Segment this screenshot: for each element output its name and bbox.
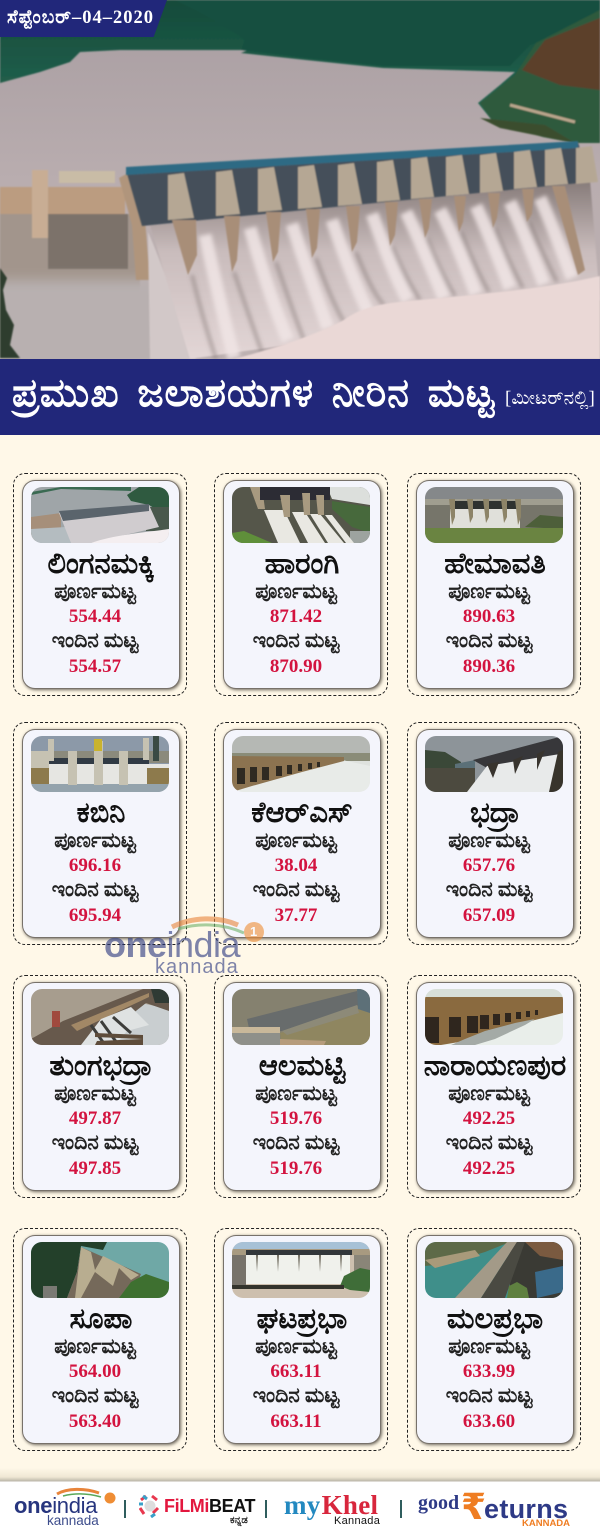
panel: ಕೆಆರ್‌ಎಸ್ (214, 722, 388, 945)
panel: ಕಬಿನಿ: 695.94 (69, 905, 121, 926)
separator (265, 1500, 267, 1518)
logo: goodreturns: eturns (484, 1494, 568, 1524)
hero photo: dam with open spillways (0, 0, 600, 359)
full level: ಪೂರ್ಣಮಟ್ಟ (54, 1083, 136, 1105)
photo: Harangi dam (232, 487, 370, 543)
watermark: oneindia kannada (104, 916, 264, 978)
photo: Hemavathi dam (425, 487, 563, 543)
logo: mykhel: myKhel (284, 1490, 378, 1520)
panel: ಆಲಮಟ್ಟಿ: 519.76 (270, 1158, 322, 1179)
panel: ಭದ್ರಾ (407, 722, 581, 945)
today's level: ಇಂದಿನ ಮಟ್ಟ (446, 879, 532, 901)
today's level: ಇಂದಿನ ಮಟ್ಟ (253, 879, 339, 901)
date ribbon (0, 0, 167, 37)
today's level: ಇಂದಿನ ಮಟ್ಟ (52, 630, 138, 652)
today's level: ಇಂದಿನ ಮಟ್ಟ (446, 1385, 532, 1407)
panel: ನಾರಾಯಣಪುರ: 492.25 (463, 1158, 515, 1179)
today's level: ಇಂದಿನ ಮಟ್ಟ (446, 1132, 532, 1154)
separator (124, 1500, 126, 1518)
panel: ಭದ್ರಾ: 657.76 (463, 855, 515, 876)
panel: ಲಿಂಗನಮಕ್ಕಿ: 554.57 (69, 656, 121, 677)
full level: ಪೂರ್ಣಮಟ್ಟ (448, 581, 530, 603)
full level: ಪೂರ್ಣಮಟ್ಟ (255, 830, 337, 852)
dam name: ಕಬಿನಿ (77, 797, 125, 829)
panel: ಹೇಮಾವತಿ: 890.63 (463, 606, 515, 627)
unit note: [ಮೀಟರ್‌ನಲ್ಲಿ] (505, 388, 595, 409)
panel: ಕಬಿನಿ (13, 722, 187, 945)
photo: Supa dam (31, 1242, 169, 1298)
panel: ನಾರಾಯಣಪುರ (407, 975, 581, 1198)
date ribbon: ಸೆಪ್ಟೆಂಬರ್–04–2020 (7, 8, 154, 28)
spillway streaks (192, 198, 572, 359)
logo: filmibeat: ಕನ್ನಡ (230, 1515, 248, 1526)
logo: goodreturns (418, 1487, 570, 1529)
watermark: oneindia kannada: 1 (250, 924, 257, 939)
panel: ಹಾರಂಗಿ: 871.42 (270, 606, 322, 627)
panel: ಹಾರಂಗಿ (214, 473, 388, 696)
dam name: ಹಾರಂಗಿ (265, 548, 339, 580)
logo: goodreturns: good (418, 1492, 459, 1514)
dam name: ಘಟಪ್ರಭಾ (257, 1303, 347, 1335)
photo: Bhadra dam (425, 736, 563, 792)
dam name: ಮಲಪ್ರಭಾ (447, 1303, 543, 1335)
separator (400, 1500, 402, 1518)
full level: ಪೂರ್ಣಮಟ್ಟ (255, 1336, 337, 1358)
photo: Malaprabha dam (425, 1242, 563, 1298)
main heading: ಪ್ರಮುಖ ಜಲಾಶಯಗಳ ನೀರಿನ ಮಟ್ಟ (12, 372, 495, 415)
panel: ಘಟಪ್ರಭಾ: 663.11 (270, 1361, 322, 1382)
watermark: oneindia kannada: kannada (155, 956, 239, 978)
panel: ಲಿಂಗನಮಕ್ಕಿ (13, 473, 187, 696)
full level: ಪೂರ್ಣಮಟ್ಟ (448, 1083, 530, 1105)
panel: ತುಂಗಭದ್ರಾ: 497.87 (69, 1108, 121, 1129)
panel: ಮಲಪ್ರಭಾ (407, 1228, 581, 1451)
photo: Narayanapura dam (425, 989, 563, 1045)
today's level: ಇಂದಿನ ಮಟ್ಟ (446, 630, 532, 652)
dam name: ಸೂಪಾ (70, 1303, 132, 1335)
panel: ಕೆಆರ್‌ಎಸ್: 37.77 (275, 905, 317, 926)
full level: ಪೂರ್ಣಮಟ್ಟ (448, 830, 530, 852)
dam name: ತುಂಗಭದ್ರಾ (49, 1050, 153, 1082)
photo: Ghataprabha dam (232, 1242, 370, 1298)
logo: mykhel: Kannada (334, 1515, 380, 1527)
logo: filmibeat: FiLMiBEAT (164, 1496, 255, 1516)
panel: ನಾರಾಯಣಪುರ: 492.25 (463, 1108, 515, 1129)
photo: KRS dam (232, 736, 370, 792)
photo: Linganamakki dam (31, 487, 169, 543)
today's level: ಇಂದಿನ ಮಟ್ಟ (52, 879, 138, 901)
panel: ಘಟಪ್ರಭಾ: 663.11 (270, 1411, 322, 1432)
title bar (0, 359, 600, 435)
panel: ಮಲಪ್ರಭಾ: 633.99 (463, 1361, 515, 1382)
full level: ಪೂರ್ಣಮಟ್ಟ (54, 830, 136, 852)
panel: ಹೇಮಾವತಿ: 890.36 (463, 656, 515, 677)
logo: oneindia (14, 1488, 116, 1528)
today's level: ಇಂದಿನ ಮಟ್ಟ (253, 1385, 339, 1407)
panel: ಆಲಮಟ್ಟಿ: 519.76 (270, 1108, 322, 1129)
today's level: ಇಂದಿನ ಮಟ್ಟ (52, 1385, 138, 1407)
logo: goodreturns: ₹ (461, 1487, 486, 1528)
full level: ಪೂರ್ಣಮಟ್ಟ (54, 581, 136, 603)
panel: ತುಂಗಭದ್ರಾ (13, 975, 187, 1198)
dam name: ನಾರಾಯಣಪುರ (424, 1050, 566, 1082)
dam name: ಲಿಂಗನಮಕ್ಕಿ (47, 548, 155, 580)
photo: Almatti dam (232, 989, 370, 1045)
today's level: ಇಂದಿನ ಮಟ್ಟ (253, 630, 339, 652)
panel: ಹಾರಂಗಿ: 870.90 (270, 656, 322, 677)
panel: ಭದ್ರಾ: 657.09 (463, 905, 515, 926)
full level: ಪೂರ್ಣಮಟ್ಟ (54, 1336, 136, 1358)
panel: ಘಟಪ್ರಭಾ (214, 1228, 388, 1451)
panel: ಕೆಆರ್‌ಎಸ್: 38.04 (275, 855, 317, 876)
full level: ಪೂರ್ಣಮಟ್ಟ (255, 1083, 337, 1105)
panel: ಮಲಪ್ರಭಾ: 633.60 (463, 1411, 515, 1432)
panel: ಸೂಪಾ (13, 1228, 187, 1451)
photo: Kabini dam (31, 736, 169, 792)
dam name: ಕೆಆರ್‌ಎಸ್ (251, 797, 353, 829)
panel: ಆಲಮಟ್ಟಿ (214, 975, 388, 1198)
panel: ಲಿಂಗನಮಕ್ಕಿ: 554.44 (69, 606, 121, 627)
today's level: ಇಂದಿನ ಮಟ್ಟ (52, 1132, 138, 1154)
panel: ಸೂಪಾ: 564.00 (69, 1361, 121, 1382)
logo: oneindia: oneindia (14, 1493, 97, 1518)
today's level: ಇಂದಿನ ಮಟ್ಟ (253, 1132, 339, 1154)
logo: goodreturns: KANNADA (522, 1518, 570, 1529)
full level: ಪೂರ್ಣಮಟ್ಟ (255, 581, 337, 603)
logo: filmibeat (139, 1494, 256, 1526)
photo: Tungabhadra dam (31, 989, 169, 1045)
panel: ಸೂಪಾ: 563.40 (69, 1411, 121, 1432)
watermark: oneindia kannada: oneindia (104, 924, 240, 965)
dam name: ಹೇಮಾವತಿ (444, 548, 546, 580)
panel: ಕಬಿನಿ: 696.16 (69, 855, 121, 876)
full level: ಪೂರ್ಣಮಟ್ಟ (448, 1336, 530, 1358)
footer band (0, 1468, 600, 1538)
panel: ತುಂಗಭದ್ರಾ: 497.85 (69, 1158, 121, 1179)
logo: oneindia: kannada (47, 1513, 99, 1528)
dam name: ಭದ್ರಾ (470, 797, 520, 829)
panel: ಹೇಮಾವತಿ (407, 473, 581, 696)
dam name: ಆಲಮಟ್ಟಿ (259, 1050, 345, 1082)
